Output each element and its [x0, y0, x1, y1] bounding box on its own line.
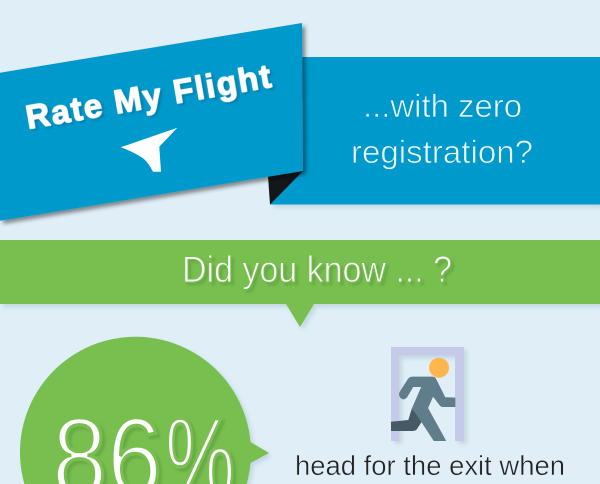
- back leg: [391, 408, 422, 431]
- caption text: head for the exit when: [295, 450, 565, 481]
- tagline text: ...with zero: [363, 88, 522, 124]
- icon: paper plane: [121, 128, 177, 172]
- body: [399, 377, 455, 441]
- tagline text: [351, 88, 533, 170]
- title: Rate My Flight: [23, 57, 274, 136]
- tagline text: registration?: [351, 134, 533, 170]
- heading: Did you know ... ?: [182, 249, 452, 290]
- head: [429, 358, 449, 378]
- statistic: 86%: [52, 395, 235, 484]
- panel: statistic bubble: [20, 337, 269, 484]
- panel: registration banner: [270, 57, 600, 204]
- icon: person running through exit: [391, 347, 464, 441]
- panel: title ribbon: [0, 23, 303, 221]
- panel: did you know band: [0, 240, 600, 327]
- ribbon fold: [268, 171, 303, 204]
